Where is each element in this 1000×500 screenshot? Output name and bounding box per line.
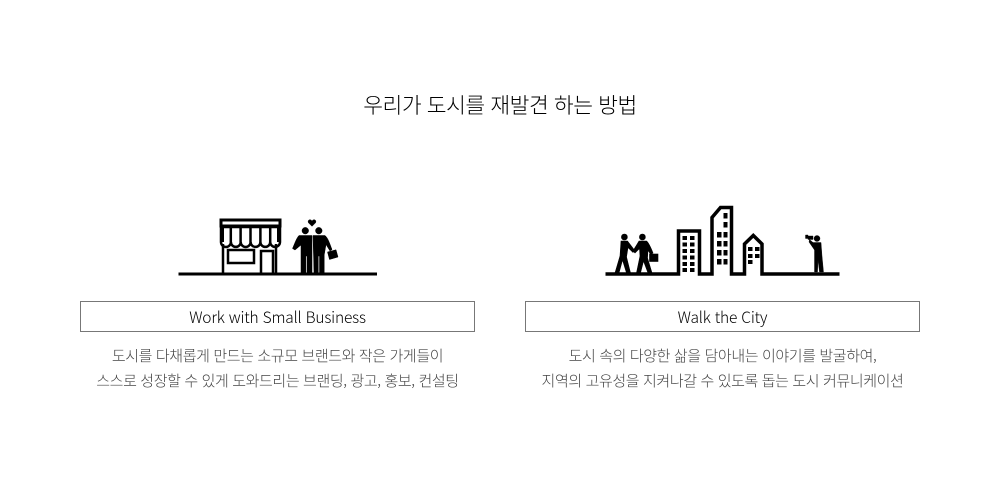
building windows	[682, 213, 760, 272]
ground line	[178, 272, 377, 276]
text block: small business description	[96, 345, 459, 390]
icon: storefront and couple on ground line	[178, 218, 377, 276]
couple with heart and briefcase	[292, 220, 338, 273]
text block: walk the city description	[542, 345, 903, 390]
title: 우리가 도시를 재발견 하는 방법	[363, 89, 637, 120]
text block: walk the city description: 도시 속의 다양한 삶을 담아내는 이야기를 발굴하여,	[569, 345, 876, 366]
handshake figures with briefcase	[615, 234, 658, 273]
panel: work with small business label: Work with Small Business	[189, 306, 366, 328]
panel: work with small business label	[80, 301, 475, 332]
panel: walk the city label: Walk the City	[678, 306, 767, 328]
text block: walk the city description: 지역의 고유성을 지켜나갈 수 있도록 돕는 도시 커뮤니케이션	[542, 370, 903, 390]
panel: walk the city label	[525, 301, 920, 332]
icon: people, city buildings and photographer on ground line	[606, 206, 840, 276]
photographer with camera	[806, 235, 824, 272]
storefront	[221, 220, 280, 273]
ground line	[606, 208, 840, 274]
text block: small business description: 스스로 성장할 수 있게 도와드리는 브랜딩, 광고, 홍보, 컨설팅	[96, 370, 459, 390]
text block: small business description: 도시를 다채롭게 만드는 소규모 브랜드와 작은 가게들이	[112, 345, 443, 366]
